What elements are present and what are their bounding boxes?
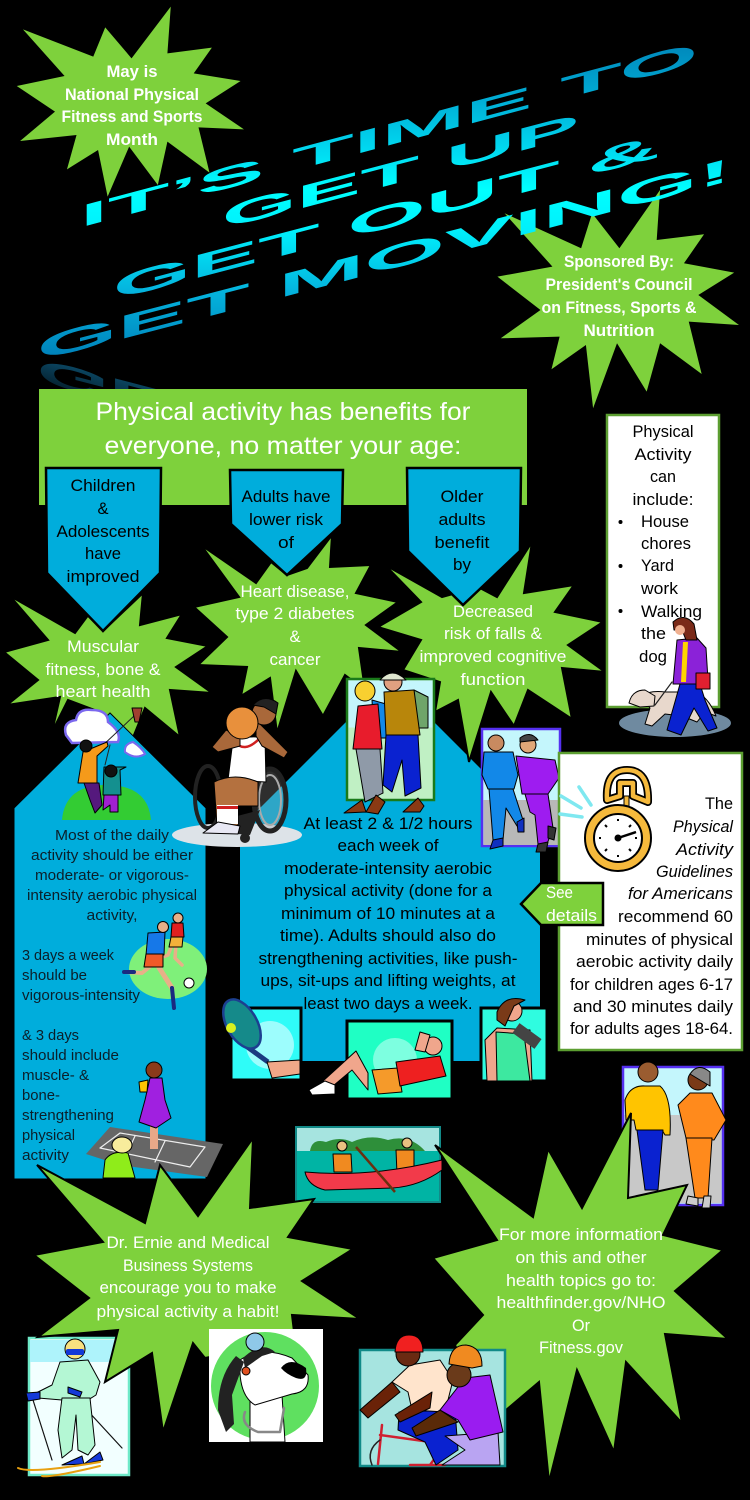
arrow text: older adults: Older [440, 488, 484, 506]
burst text: sponsored by: Nutrition [584, 322, 654, 340]
arrow text: adults [242, 488, 330, 552]
panel: center aerobic guidance text: moderate-intensity aerobic [284, 860, 492, 878]
burst text: more information: For more information [499, 1226, 663, 1244]
starburst: heart disease [194, 535, 402, 733]
starburst: May is National Physical Fitness and Sports Month [17, 7, 244, 197]
text: strengthening days [22, 1027, 119, 1164]
burst text: sponsored by: President's Council [546, 276, 692, 294]
panel: physical activity can include [607, 415, 719, 707]
burst text: decreased risk: risk of falls & [444, 625, 542, 643]
guidelines text: minutes of physical [586, 931, 733, 949]
text: vigorous days: should be [22, 967, 87, 984]
icon: couple on a tandem bike [360, 1335, 505, 1466]
arrow: see details [521, 883, 603, 925]
burst text: decreased risk [420, 603, 566, 689]
arrow text: older adults [434, 488, 490, 574]
icon: situps [309, 1021, 452, 1099]
arrow text: children [56, 477, 150, 586]
burst text: sponsored by [542, 253, 697, 340]
burst text: sponsored by: on Fitness, Sports & [542, 299, 697, 317]
panel: center aerobic guidance text: each week of [338, 837, 439, 855]
text: daily activity: Most of the daily [55, 827, 170, 844]
list items [618, 513, 702, 666]
guidelines text: Physical [673, 818, 734, 836]
title: slanted word art: GET [37, 350, 228, 436]
arrow text: children: Children [70, 477, 136, 495]
arrow: children and adolescents [46, 468, 161, 631]
icon: skier [18, 1338, 129, 1476]
burst text: heart disease: type 2 diabetes [236, 605, 354, 623]
text: daily activity: intensity aerobic physical [27, 887, 197, 904]
guidelines text: for adults ages 18-64. [570, 1020, 733, 1038]
icon: joggers [482, 729, 560, 852]
starburst: decreased risk [378, 542, 605, 762]
text: daily activity: activity, [86, 907, 138, 924]
burst text: heart disease: & [289, 628, 301, 646]
icon: doctor dog [209, 1329, 323, 1442]
guidelines text [570, 795, 735, 1038]
burst text: more information: Fitness.gov [539, 1339, 624, 1357]
burst text: more information: Or [572, 1317, 590, 1335]
list items: dog [639, 648, 667, 666]
guidelines text: and 30 minutes daily [573, 998, 734, 1016]
arrow: older adults [407, 468, 521, 605]
burst text: decreased risk: improved cognitive [420, 648, 566, 666]
starburst: more information [433, 1113, 728, 1482]
list heading [632, 423, 694, 509]
arrow text: see details: See [546, 884, 573, 902]
panel: center aerobic guidance text: At least 2 & 1/2 hours [304, 815, 472, 833]
icon: hopscotch [86, 1062, 223, 1178]
panel: center aerobic guidance text [258, 815, 518, 1013]
icon: tennis racket [216, 993, 301, 1080]
title: slanted word art: GET OUT & [113, 128, 660, 308]
icon: walking couple [623, 1062, 726, 1208]
text: vigorous days: vigorous-intensity [22, 987, 141, 1004]
text: daily activity: moderate- or vigorous- [35, 867, 189, 884]
guidelines text: for Americans [628, 885, 733, 903]
burst text: heart disease: Heart disease, [240, 583, 350, 601]
text: strengthening days: activity [22, 1147, 70, 1164]
burst text: sponsored by: Sponsored By: [564, 253, 674, 271]
guidelines text: aerobic activity daily [576, 953, 734, 971]
burst text: Dr. Ernie: Business Systems [123, 1257, 253, 1275]
icon: flying a kite [62, 708, 151, 820]
burst text: muscular fitness: Muscular [67, 638, 140, 656]
panel: benefits heading [39, 389, 527, 505]
arrow text: see details [546, 884, 597, 925]
arrow text: older adults: benefit [434, 534, 490, 552]
arrow text: children: have [85, 545, 121, 563]
panel: center aerobic guidance text: ups, sit-ups and lifting weights, at [260, 972, 516, 990]
panel: center aerobic guidance text: time). Adults should also do [280, 927, 496, 945]
panel: center aerobic guidance text: physical activity (done for a [284, 882, 493, 900]
panel: center aerobic guidance text: least two days a week. [304, 995, 472, 1013]
burst text: more information: health topics go to: [506, 1272, 656, 1290]
heading text: everyone, no matter your age: [104, 432, 462, 460]
starburst: sponsor [497, 190, 739, 408]
burst text: more information [496, 1226, 666, 1357]
list items: work [640, 580, 679, 598]
heading text [96, 398, 470, 460]
starburst: muscular fitness [4, 593, 212, 740]
panel: left children house [14, 713, 206, 1179]
text: strengthening days: muscle- & [22, 1067, 89, 1084]
text: strengthening days: should include [22, 1047, 119, 1064]
icon: wheelchair basketball player [172, 698, 302, 847]
burst text: national fitness month [62, 63, 202, 149]
text: strengthening days: bone- [22, 1087, 60, 1104]
burst text: Dr. Ernie: encourage you to make [100, 1279, 276, 1297]
text: strengthening days: physical [22, 1127, 75, 1144]
burst text: national fitness month: Fitness and Sports [62, 108, 202, 126]
arrow text: adults: Adults have [242, 488, 330, 506]
icon: woman lifting dumbbell [481, 998, 547, 1081]
burst text: muscular fitness: heart health [56, 683, 150, 701]
heading text: Physical activity has benefits for [96, 398, 470, 426]
guidelines text: Guidelines [656, 863, 733, 881]
starburst: Dr. Ernie encouragement [34, 1138, 360, 1432]
arrow text: older adults: by [453, 556, 472, 574]
burst text: national fitness month: National Physical [65, 86, 199, 104]
panel: center aerobic guidance text: strengthening activities, like push- [258, 950, 518, 968]
arrow text: children: & [97, 500, 109, 518]
arrow text: adults: of [278, 534, 294, 552]
arrow text: see details: details [546, 907, 597, 925]
panel: center activity house background [240, 678, 540, 1061]
icon: canoe [296, 1127, 442, 1202]
burst text: decreased risk: Decreased [453, 603, 533, 621]
panel: center aerobic guidance text: minimum of 10 minutes at a [281, 905, 496, 923]
list items: chores [641, 535, 691, 553]
text: daily activity: activity should be either [31, 847, 193, 864]
burst text: more information: healthfinder.gov/NHO [496, 1294, 666, 1312]
burst text: Dr. Ernie: Dr. Ernie and Medical [106, 1234, 270, 1252]
arrow text: children: Adolescents [56, 523, 150, 541]
title: slanted word art: IT’S TIME TO [80, 35, 698, 234]
list items: the [641, 625, 666, 643]
arrow: adults [230, 470, 343, 575]
guidelines text: recommend 60 [618, 908, 733, 926]
burst text: muscular fitness [46, 638, 160, 701]
text: strengthening days: & 3 days [22, 1027, 79, 1044]
guidelines text: Activity [675, 841, 735, 859]
list heading: include: [632, 491, 694, 509]
list items: Yard [641, 557, 674, 575]
list heading: Physical [632, 423, 694, 441]
guidelines text: for children ages 6-17 [570, 976, 733, 994]
arrow text: adults: lower risk [249, 511, 324, 529]
burst text: heart disease [236, 583, 354, 669]
icon: woman walking dog [619, 617, 731, 737]
arrow text: children: improved [66, 568, 140, 586]
burst text: decreased risk: function [460, 671, 526, 689]
panel: physical activity guidelines [559, 753, 742, 1050]
burst text: more information: on this and other [516, 1249, 647, 1267]
icon: soccer players [124, 913, 207, 1008]
title: slanted word art: GET MOVING! [37, 152, 732, 369]
title: slanted word art [37, 35, 732, 436]
text: daily activity [27, 827, 197, 924]
burst text: heart disease: cancer [270, 651, 321, 669]
text: strengthening days: strengthening [22, 1107, 114, 1124]
guidelines text: The [705, 795, 733, 813]
text: vigorous days [22, 947, 141, 1004]
title: slanted word art: GET UP [222, 107, 579, 236]
list heading: Activity [634, 446, 692, 464]
list items: House [641, 513, 689, 531]
burst text: national fitness month: May is [106, 63, 158, 81]
list items: Walking [641, 603, 702, 621]
icon: stopwatch [560, 770, 651, 871]
arrow text: older adults: adults [438, 511, 486, 529]
burst text: Dr. Ernie: physical activity a habit! [96, 1303, 280, 1321]
list heading: can [650, 468, 676, 486]
burst text: national fitness month: Month [106, 131, 158, 149]
text: vigorous days: 3 days a week [22, 947, 114, 964]
burst text: Dr. Ernie [96, 1234, 280, 1321]
burst text: muscular fitness: fitness, bone & [46, 661, 160, 679]
icon: hikers [344, 673, 434, 814]
